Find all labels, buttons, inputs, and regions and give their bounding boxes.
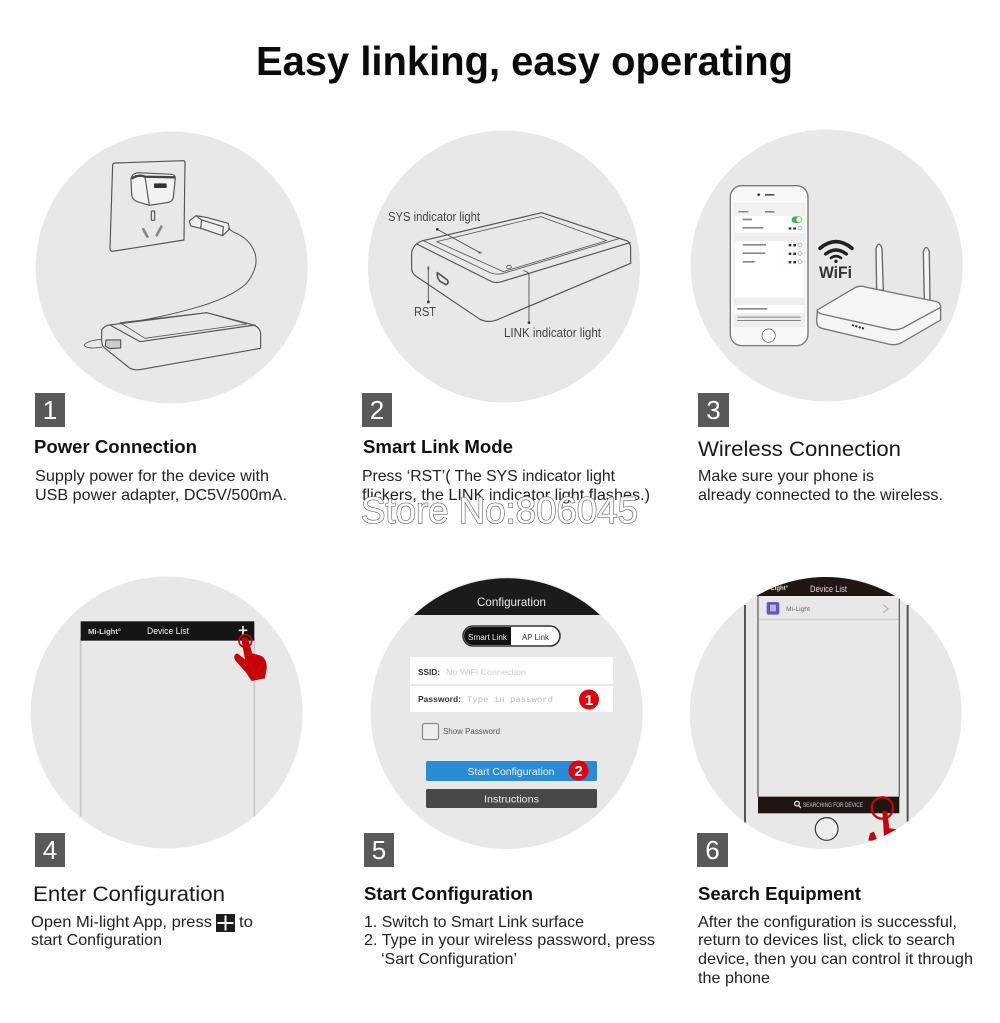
app header black cap [414, 578, 600, 615]
badge: 1 [579, 690, 599, 710]
text: enter configuration description: to [239, 914, 253, 931]
panel: step 5 start configuration [364, 577, 655, 968]
app bar text: Mi-Light: Light° [771, 586, 789, 592]
step number 3: 3 [706, 395, 721, 425]
step number 5 [364, 833, 394, 867]
heading: Start Configuration: Start Configuration [364, 884, 533, 904]
panel: step 1 power connection [34, 132, 308, 504]
heading: Power Connection: Power Connection [34, 437, 197, 457]
illustration: controller with indicator lights [412, 213, 631, 324]
text: power description: Supply power for the device with [35, 468, 269, 485]
step number 5: 5 [372, 835, 386, 865]
button: Start Configuration: Start Configuration [468, 766, 555, 778]
title: Easy linking, easy operating [256, 38, 793, 84]
toggle: Smart Link / AP Link: Smart Link [468, 632, 508, 642]
illustration: socket, USB cable and controller [84, 161, 261, 370]
toggle: Smart Link / AP Link [463, 626, 560, 646]
form fields: No WiFi Connection [446, 667, 526, 677]
text: search description [698, 914, 973, 987]
app bar title: Device List [147, 626, 189, 637]
checkbox: Show Password [422, 724, 500, 740]
button: Instructions: Instructions [484, 794, 539, 806]
heading: Enter Configuration: Enter Configuration [33, 883, 225, 906]
circle background 1 [36, 132, 308, 404]
checkbox: Show Password: Show Password [443, 727, 500, 736]
text: enter configuration description: Open Mi-light App, press [31, 914, 212, 931]
label: RST: RST [414, 305, 436, 319]
label: LINK indicator light: LINK indicator light [504, 326, 601, 340]
illustration: device list screen with tapping hand [81, 621, 267, 817]
text: enter configuration description: start Configuration [31, 932, 162, 949]
icon: router [817, 244, 941, 345]
circle background 4 [31, 576, 303, 848]
list item: Mi-Light: Mi-Light [786, 606, 810, 613]
form fields [410, 657, 613, 712]
panel: step 3 wireless connection [691, 130, 963, 504]
heading: Wireless Connection: Wireless Connection [698, 438, 901, 461]
step number 4 [35, 833, 65, 867]
text: start configuration steps: 2. Type in your wireless password, press [364, 932, 655, 949]
text: smart link description: flickers, the LINK indicator light flashes.) [362, 487, 650, 504]
text: search description: return to devices list, click to search [698, 932, 955, 949]
app logo text: Mi-Light° [88, 627, 121, 636]
panel: step 6 search equipment [690, 577, 973, 987]
illustration: phone, WiFi and router [730, 186, 941, 346]
text: start configuration steps: 1. Switch to Smart Link surface [364, 914, 584, 931]
step number 1: 1 [43, 395, 57, 425]
text: enter configuration description [31, 914, 253, 949]
app bar title: Device List [810, 584, 847, 595]
badge: 2: 2 [574, 763, 583, 780]
step number 2 [362, 393, 392, 427]
step number 3 [698, 393, 729, 427]
badge: 1: 1 [585, 692, 593, 709]
text: wireless description [698, 468, 943, 504]
form fields: SSID: [418, 667, 440, 677]
text: smart link description [362, 468, 650, 504]
label: WiFi: WiFi [819, 263, 852, 282]
icon: plus box [216, 914, 235, 932]
step number 1 [35, 393, 65, 427]
footer: searching for device: SEARCHING FOR DEVICE [803, 803, 863, 809]
icon: wifi [820, 242, 852, 263]
step number 2: 2 [370, 395, 384, 425]
text: start configuration steps: ‘Sart Configuration’ [381, 951, 517, 968]
step number 6: 6 [705, 835, 720, 865]
button: Instructions [426, 789, 597, 808]
heading: Search Equipment: Search Equipment [698, 884, 861, 904]
text: search description: the phone [698, 970, 770, 987]
text: power description [35, 468, 287, 504]
watermark: Store No:806045 [361, 490, 638, 531]
heading: Smart Link Mode: Smart Link Mode [363, 437, 513, 457]
illustration: phone with device list [745, 577, 908, 841]
text: start configuration steps [364, 914, 655, 968]
text: search description: After the configuration is successful, [698, 914, 957, 931]
circle background 6 [690, 577, 962, 849]
toggle: Smart Link / AP Link: AP Link [522, 632, 550, 642]
text: search description: device, then you can control it through [698, 951, 973, 968]
step number 6 [697, 833, 728, 867]
text: power description: USB power adapter, DC5V/500mA. [35, 487, 287, 504]
circle background 2 [368, 130, 640, 402]
circle background 3 [691, 130, 963, 402]
form fields: Type in password [467, 695, 553, 705]
form fields: Password: [418, 694, 461, 704]
header title: Configuration: Configuration [477, 595, 546, 609]
panel: step 4 enter configuration [31, 576, 303, 949]
badge: 2 [568, 760, 588, 780]
button: Start Configuration [426, 761, 597, 781]
circle background 5 [371, 577, 643, 849]
panel: step 2 smart link mode [362, 130, 650, 504]
text: smart link description: Press ‘RST’( The SYS indicator light [362, 468, 616, 485]
step number 4: 4 [43, 835, 57, 865]
text: wireless description: Make sure your phone is [698, 468, 874, 485]
icon: phone [730, 186, 808, 346]
text: wireless description: already connected to the wireless. [698, 487, 943, 504]
label: SYS indicator light: SYS indicator light [388, 210, 480, 224]
